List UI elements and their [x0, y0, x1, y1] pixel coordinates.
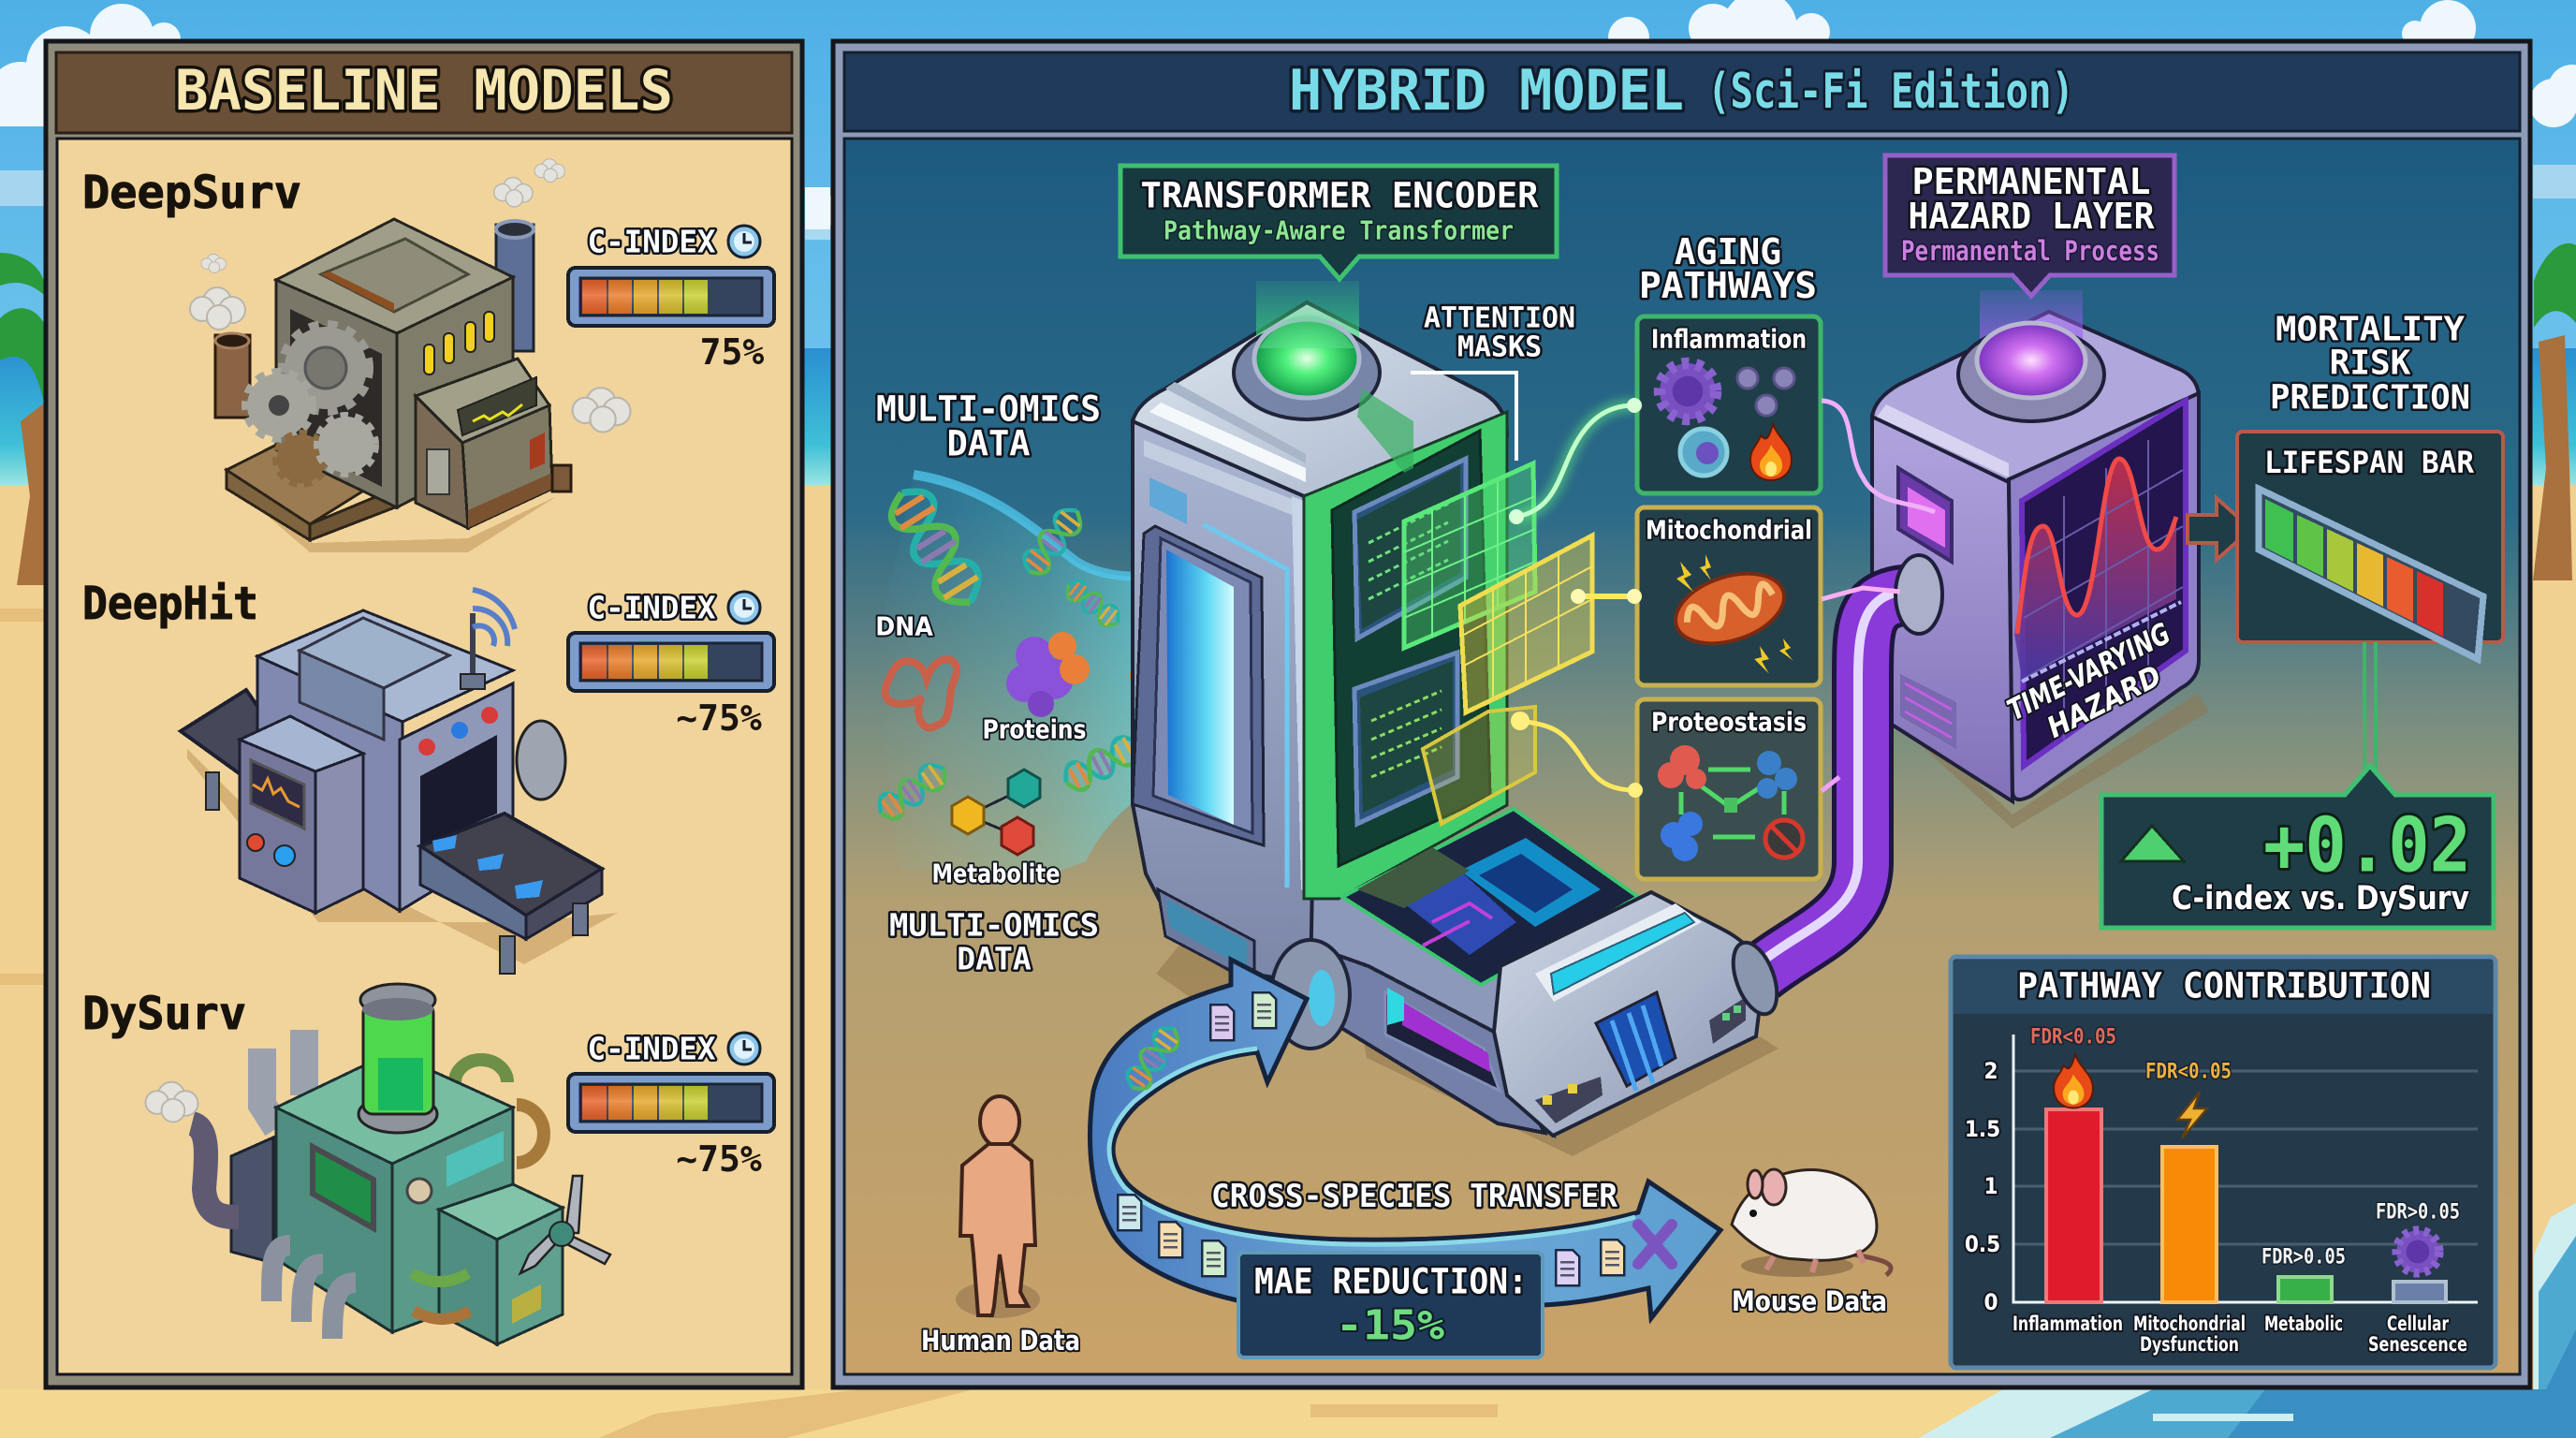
chart panel: pathway contribution: [1951, 957, 2496, 1368]
hazard top face: [1872, 312, 2199, 482]
icon: human: [956, 1096, 1040, 1318]
x label metabolic: Metabolic: [2264, 1313, 2343, 1335]
icon: molecule: [1638, 1225, 1672, 1264]
heading: hybrid model: HYBRID MODEL: [1289, 58, 1684, 124]
heading line 3: PREDICTION: [2270, 378, 2470, 418]
lifespan label: LIFESPAN BAR: [2264, 445, 2475, 480]
callout box: [1120, 166, 1557, 279]
c-index label: C-INDEX: [588, 1030, 716, 1067]
hazard: HAZARD: [2042, 659, 2167, 745]
tower screen face: [1304, 412, 1507, 899]
label Proteins: Proteins: [983, 713, 1086, 745]
y-axis tick 1.5: 1.5: [1965, 1116, 2000, 1142]
label human: Human Data: [921, 1325, 1080, 1357]
arrow: hazard to lifespan: [2188, 498, 2251, 560]
pink connector middle: [1822, 588, 1900, 599]
lifespan box: [2237, 432, 2503, 642]
card box: [1637, 507, 1821, 685]
callout line 2: HAZARD LAYER: [1908, 196, 2155, 237]
left palm tree: [0, 253, 45, 585]
pipe fill: [1760, 594, 1919, 974]
pink connector top: [1822, 401, 1935, 512]
attention label line 2: MASKS: [1457, 331, 1542, 363]
icon: smoke puffs: [190, 159, 631, 433]
panel frame: [46, 41, 802, 1387]
MAE box: [1238, 1253, 1543, 1357]
bar: mitochondrial dysfunction: [2162, 1147, 2217, 1302]
label Metabolite: Metabolite: [932, 858, 1060, 889]
card label: Mitochondrial: [1646, 515, 1812, 545]
tower left face: [1133, 421, 1312, 983]
c-index bar: [568, 268, 774, 326]
card box: [1637, 699, 1821, 879]
machine: DySurv green reactor: [192, 984, 610, 1344]
model: DySurv: [82, 984, 774, 1344]
attention masks overlays: [1404, 463, 1592, 824]
base underlay rim: [1304, 866, 1554, 1136]
c-index value: ~75%: [676, 1138, 762, 1180]
green mask grid: [1404, 482, 1535, 637]
y-axis tick 2: 2: [1983, 1058, 1998, 1084]
x label cellular: Cellular: [2387, 1313, 2450, 1335]
green connector: [1516, 405, 1634, 517]
icon: rope protein: [885, 659, 957, 727]
icon: clock: [728, 226, 760, 257]
c-index value: 75%: [700, 331, 764, 373]
chart title: PATHWAY CONTRIBUTION: [2017, 966, 2431, 1005]
card: proteostasis: [1637, 699, 1821, 879]
callout subtitle: Pathway-Aware Transformer: [1164, 215, 1514, 245]
hazard left face: [1872, 417, 2012, 801]
x label senescence: Senescence: [2368, 1333, 2467, 1356]
arrow: ribbon: [1090, 960, 1720, 1318]
x label mitochondrial: Mitochondrial: [2133, 1313, 2246, 1335]
icon: smoke puff: [145, 1082, 198, 1122]
label mouse: Mouse Data: [1732, 1285, 1887, 1317]
bar: metabolic: [2278, 1277, 2332, 1302]
label: data lower: DATA: [957, 940, 1032, 977]
lower pipe collar: [1725, 937, 1785, 1020]
panel header: [56, 52, 792, 133]
beam and orb: [1256, 281, 1359, 374]
tower top face: [1133, 302, 1507, 496]
pink connector lower: [1822, 777, 1839, 791]
connector to gain box: [2364, 642, 2376, 777]
multi-omics inputs: [873, 389, 1174, 977]
label DNA: DNA: [875, 610, 933, 642]
card: inflammation: [1637, 316, 1821, 493]
callout box: [1885, 155, 2174, 296]
card label: Proteostasis: [1651, 706, 1807, 738]
purple pipe: [1725, 555, 1942, 1020]
machine: permanental hazard layer: [1863, 290, 2209, 829]
hazard left port: [1898, 468, 1952, 562]
heading line 1: AGING: [1675, 231, 1781, 272]
yellow mask grid: [1460, 554, 1592, 697]
yellow mask: [1460, 536, 1592, 712]
heading: sci-fi edition: (Sci-Fi Edition): [1707, 64, 2074, 120]
x label dysfunction: Dysfunction: [2140, 1333, 2239, 1356]
c-index bar: [568, 633, 774, 691]
lifespan gauge: [2259, 489, 2483, 659]
base lower-left panel: [1306, 946, 1544, 1133]
icon: dna on ribbon: [1122, 1021, 1184, 1094]
panel: hybrid model: [833, 41, 2530, 1387]
y-axis tick 1: 1: [1983, 1173, 1998, 1199]
leader line: [1411, 373, 1516, 461]
icon: blue cell: [1680, 429, 1727, 476]
panel frame: [833, 41, 2530, 1387]
label: attention masks: [1411, 301, 1575, 461]
panel header: [844, 52, 2520, 131]
right palm tree: [2533, 243, 2576, 580]
significance label 3: FDR>0.05: [2261, 1245, 2346, 1269]
node dots: [1509, 398, 1643, 798]
label DeepSurv: DeepSurv: [82, 167, 301, 219]
c-index value: ~75%: [676, 697, 762, 739]
icon: flame: [1750, 424, 1792, 480]
icon: protein blobs: [1006, 632, 1174, 717]
icon: small particles: [1737, 368, 1794, 416]
bar chart: [1965, 1026, 2478, 1356]
green mask: [1404, 463, 1535, 648]
y-axis tick 0.5: 0.5: [1965, 1231, 2000, 1257]
machine: DeepHit conveyor: [181, 610, 618, 974]
heading: data: DATA: [946, 423, 1031, 464]
chart frame: [1951, 957, 2496, 1368]
aging pathways column: [1637, 231, 1821, 879]
label DySurv: DySurv: [82, 988, 246, 1040]
bar: cellular senescence: [2393, 1282, 2446, 1302]
cross-species transfer: [921, 960, 1891, 1357]
c-index label: C-INDEX: [588, 590, 716, 625]
heading line 2: RISK: [2330, 345, 2411, 382]
icon: up triangle: [2121, 826, 2184, 861]
bar: inflammation: [2046, 1109, 2101, 1302]
pipe body: [1760, 594, 1919, 974]
icon: bolt: [2177, 1092, 2207, 1138]
icon: wifi signal: [473, 590, 515, 646]
mortality risk prediction: [2237, 311, 2503, 777]
callout: transformer encoder: [1120, 166, 1557, 279]
screen label: [2002, 617, 2191, 757]
MAE value: -15%: [1336, 1301, 1445, 1350]
c-index bar: [568, 1074, 774, 1132]
icon: flame: [2054, 1054, 2093, 1108]
attention label line 1: ATTENTION: [1424, 301, 1575, 335]
gain value: +0.02: [2263, 801, 2471, 889]
panel body: [57, 139, 792, 1374]
x label inflammation: Inflammation: [2012, 1313, 2123, 1335]
icon: clock: [728, 1033, 760, 1064]
lower yellow connector: [1520, 721, 1635, 790]
green glow: [1516, 405, 1634, 517]
significance label 2: FDR<0.05: [2145, 1060, 2232, 1084]
callout: permanental hazard layer: [1885, 155, 2174, 296]
icon: mouse: [1732, 1169, 1891, 1277]
chart header: [1954, 960, 2493, 1014]
heading: multi-omics data: MULTI-OMICS: [876, 389, 1101, 429]
ribbon highlight: [1109, 1049, 1635, 1244]
gain box: [2101, 766, 2494, 928]
yellow connector: [1578, 594, 1634, 599]
callout title: TRANSFORMER ENCODER: [1140, 176, 1539, 215]
portal: [1166, 550, 1234, 825]
document icons: [1118, 992, 1624, 1285]
hazard beam and orb: [1980, 290, 2083, 370]
significance label 4: FDR>0.05: [2376, 1200, 2460, 1225]
label DeepHit: DeepHit: [82, 578, 258, 630]
icon: metabolite hexagons: [952, 770, 1040, 855]
card label: Inflammation: [1651, 324, 1807, 354]
panel body: [844, 139, 2520, 1374]
icon: senescent cell: [2396, 1230, 2439, 1273]
heading line 2: PATHWAYS: [1639, 265, 1817, 306]
lower yellow mask: [1423, 707, 1535, 824]
icon: energy bolts: [1676, 554, 1793, 674]
icon: proteostasis network: [1658, 745, 1803, 861]
machine: DeepSurv rusty gears: [215, 219, 571, 552]
ribbon connector hub: [1271, 940, 1350, 1049]
time-varying: TIME-VARYING: [2002, 617, 2176, 727]
model: DeepHit: [82, 578, 774, 974]
label: CROSS-SPECIES TRANSFER: [1211, 1178, 1618, 1215]
callout line 1: PERMANENTAL: [1911, 161, 2151, 202]
base front block: [1494, 892, 1763, 1136]
panel: baseline models: [46, 41, 802, 1387]
gain caption: C-index vs. DySurv: [2172, 880, 2469, 917]
heading: baseline models: BASELINE MODELS: [175, 58, 673, 124]
c-index label: C-INDEX: [588, 223, 716, 260]
hazard screen: [2022, 401, 2186, 766]
callout: c-index gain: [2101, 766, 2494, 928]
pipe port: [1895, 555, 1942, 634]
stream edge: [914, 475, 1217, 577]
y-axis tick 0: 0: [1983, 1289, 1998, 1315]
card box: [1637, 316, 1821, 493]
MAE label: MAE REDUCTION:: [1254, 1262, 1528, 1301]
icon: DNA strands: [873, 481, 1146, 825]
left face portal frame: [1133, 526, 1264, 845]
hazard right face: [2009, 393, 2199, 800]
card: mitochondrial: [1637, 507, 1821, 685]
callout subtitle: Permanental Process: [1901, 235, 2159, 267]
glowing signal connectors: [1509, 398, 1935, 798]
icon: mitochondrion: [1666, 561, 1793, 656]
significance label 1: FDR<0.05: [2030, 1026, 2116, 1049]
machine: transformer encoder: [1133, 281, 1778, 1156]
icon: clock: [728, 592, 760, 624]
label: multi-omics data lower: MULTI-OMICS: [889, 906, 1099, 944]
heading line 1: MORTALITY: [2276, 311, 2465, 348]
model: DeepSurv: [82, 159, 774, 552]
pipe highlight: [1764, 590, 1919, 960]
icon: immune virus: [1660, 363, 1716, 419]
data stream into transformer: [875, 475, 1217, 871]
base circuit bay: [1342, 809, 1638, 985]
